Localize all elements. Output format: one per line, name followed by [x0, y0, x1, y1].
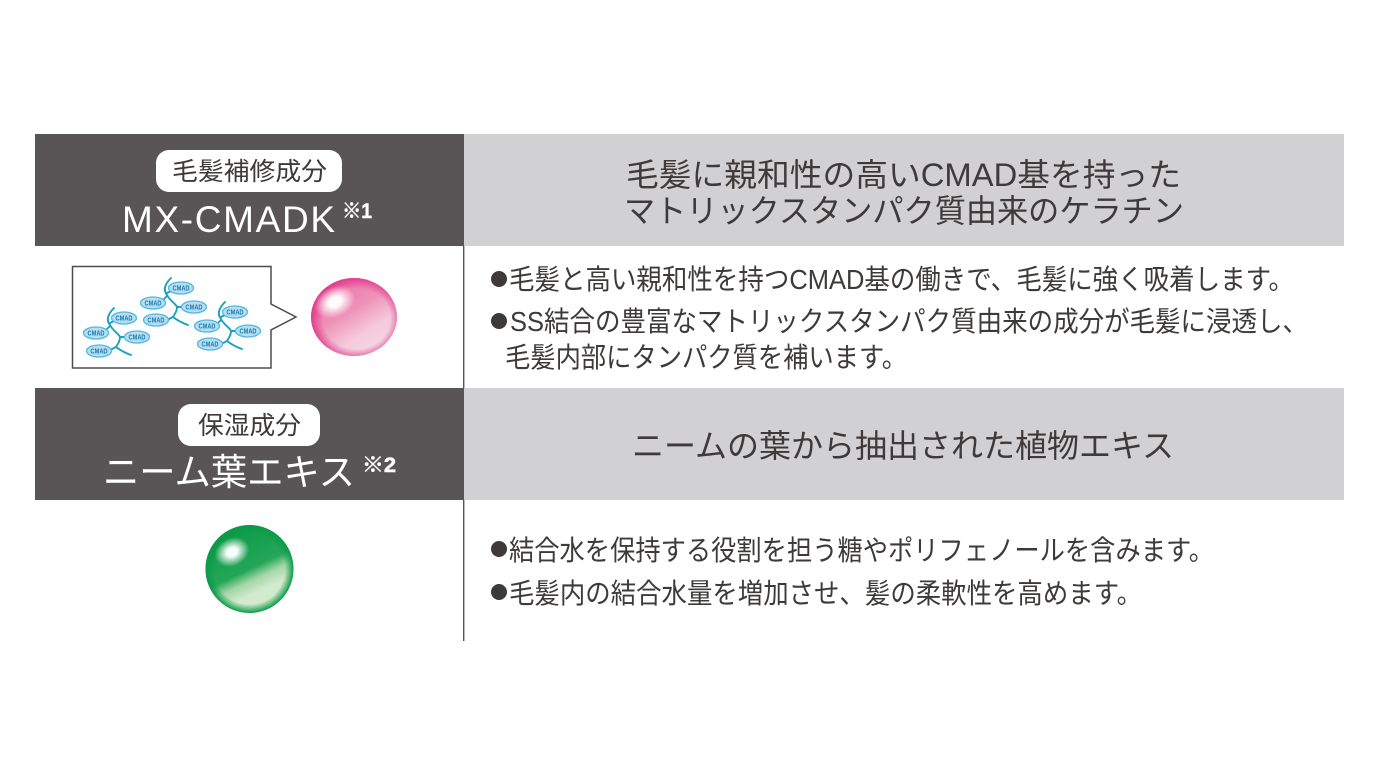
bullet list: MX-CMADK: [491, 264, 1308, 373]
bullet list: neem: [491, 535, 1214, 609]
molecule cluster right: CMAD: [202, 340, 219, 348]
ingredient name: MX-CMADK: MX-CMADK: [122, 199, 335, 240]
vertical divider: [463, 246, 464, 641]
bullet 2: 毛髪内部にタンパク質を補います。: [505, 342, 907, 373]
label pill: moisturizing ingredient: [178, 404, 320, 446]
heading line 2: マトリックスタンパク質由来のケラチン: [624, 193, 1184, 229]
ingredient name: neem leaf extract: ニーム葉エキス: [103, 452, 355, 493]
footnote mark 1: ※1: [342, 200, 372, 223]
panel: MX-CMADK header: [35, 134, 464, 246]
label pill: hair repair ingredient: 毛髪補修成分: [172, 158, 327, 186]
molecule cluster right: CMAD: [240, 326, 257, 336]
heading line 1: 毛髪に親和性の高いCMAD基を持った: [626, 157, 1181, 193]
molecule cluster middle: [140, 278, 206, 326]
icon: green sphere: [206, 525, 294, 613]
icon: pink sphere: [310, 278, 397, 356]
panel: neem description heading: [464, 388, 1344, 500]
label pill: hair repair ingredient: [156, 150, 342, 192]
molecule cluster middle: CMAD: [186, 302, 203, 312]
molecule cluster right: CMAD: [226, 308, 244, 316]
molecule cluster right: [194, 302, 260, 350]
bullet 2: 毛髪内の結合水量を増加させ、髪の柔軟性を高めます。: [509, 578, 1142, 609]
molecule cluster left: CMAD: [128, 332, 146, 342]
molecule cluster middle: CMAD: [172, 284, 190, 292]
molecule cluster left: CMAD: [116, 314, 133, 322]
panel: neem header: [35, 388, 464, 500]
molecule cluster left: CMAD: [90, 346, 108, 356]
label pill: moisturizing ingredient: 保湿成分: [198, 412, 301, 440]
panel: neem description heading: ニームの葉から抽出された植物エキス: [632, 428, 1174, 464]
bullet 1: 結合水を保持する役割を担う糖やポリフェノールを含みます。: [509, 535, 1214, 566]
molecule cluster left: CMAD: [88, 328, 105, 338]
molecule cluster middle: CMAD: [148, 316, 165, 324]
panel: MX-CMADK description heading: [464, 134, 1344, 246]
molecule cluster right: CMAD: [198, 322, 216, 330]
bullet 2: [491, 306, 1308, 373]
bullet 1: 毛髪と高い親和性を持つCMAD基の働きで、毛髪に強く吸着します。: [509, 264, 1294, 295]
molecule cluster left: [84, 308, 150, 357]
molecule cluster middle: CMAD: [144, 298, 162, 308]
footnote mark 2: ※2: [362, 454, 396, 477]
diagram: CMAD callout box: [72, 266, 296, 368]
bullet 2: SS結合の豊富なマトリックスタンパク質由来の成分が毛髪に浸透し、: [510, 306, 1308, 337]
